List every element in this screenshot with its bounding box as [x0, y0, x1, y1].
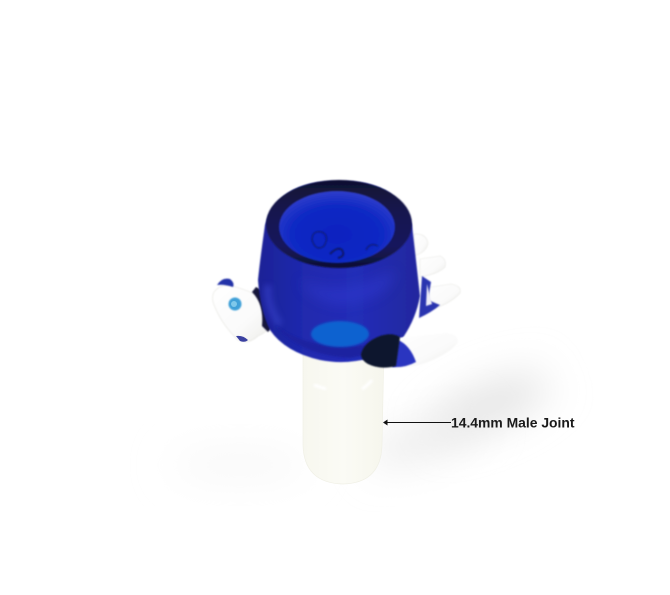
turtle head: [212, 279, 275, 342]
bowl interior: [279, 191, 395, 263]
cast shadow: [170, 363, 555, 477]
bowl rim: [266, 180, 412, 268]
bowl body: [258, 180, 420, 362]
back spikes: [414, 234, 460, 318]
callout label: 14.4mm Male Joint: [451, 414, 575, 430]
callout arrow: [383, 420, 451, 426]
glass joint: [303, 345, 384, 484]
blue base spot: [311, 321, 369, 347]
turtle rear leg: [361, 333, 458, 368]
